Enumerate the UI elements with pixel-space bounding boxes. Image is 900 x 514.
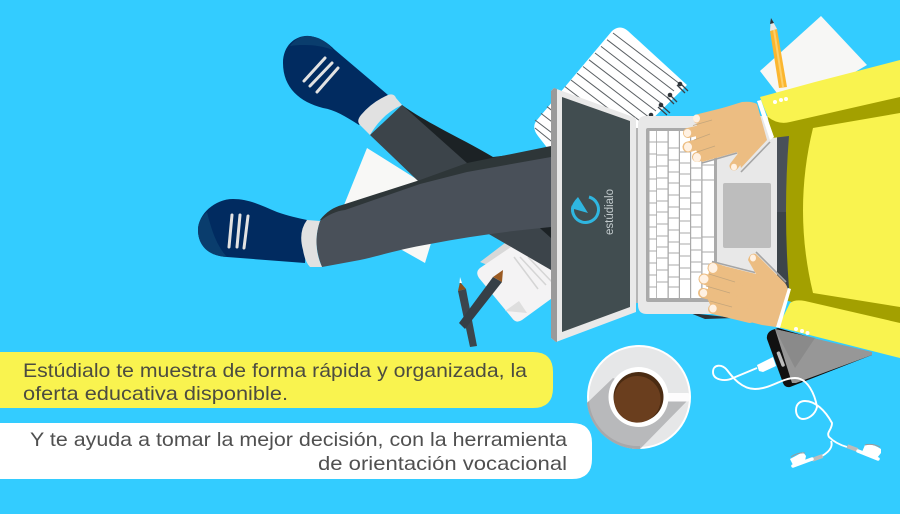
- right earbud: [847, 444, 881, 459]
- fingers: [703, 268, 750, 318]
- shirt cuff: [776, 288, 791, 328]
- upper foot: navy sock: [283, 36, 402, 135]
- hand shadow: [702, 142, 770, 172]
- laptop shadow: [690, 313, 735, 319]
- phone: [767, 328, 872, 387]
- sock stripes: [304, 58, 338, 92]
- callout: yellow message: oferta educativa disponible.: [23, 383, 288, 405]
- right hand on keyboard: [700, 252, 788, 327]
- keyboard: [646, 128, 717, 302]
- USB plug: [757, 357, 776, 372]
- fingernails: [684, 114, 737, 170]
- touchpad: [723, 183, 771, 248]
- icon: yellow pencil: [770, 18, 787, 88]
- coffee: [614, 372, 664, 422]
- callout: white message: Y te ayuda a tomar la mejor decisión, con la herramienta: [30, 429, 567, 451]
- callout: yellow message: [0, 352, 553, 408]
- notebook rings: [649, 82, 688, 117]
- coffee cup and saucer: [587, 345, 691, 449]
- sleeve buttons: [794, 327, 810, 335]
- laptop base: [638, 116, 777, 314]
- upper leg: [370, 105, 551, 270]
- laptop: [551, 88, 777, 342]
- jacket lower sleeve: [776, 288, 900, 358]
- lower foot: navy sock: [198, 199, 322, 267]
- earphones cable: [713, 357, 881, 466]
- fingernails: [700, 254, 756, 312]
- dark trousers behind laptop: [777, 135, 790, 290]
- saucer shadow: [587, 378, 688, 449]
- left earbud: [790, 452, 823, 466]
- logo wordmark: estúdialo: [604, 189, 616, 235]
- left hand on keyboard: [684, 102, 770, 172]
- jacket body: [767, 85, 900, 335]
- sock stripes: [229, 215, 248, 248]
- screen display: [562, 97, 630, 332]
- callout: white message: [0, 423, 592, 479]
- icon: crossed dark pencils: [458, 270, 503, 347]
- paper: upper right sheet: [760, 16, 867, 110]
- logo: estúdialo: [571, 189, 616, 235]
- fingers: [688, 111, 748, 166]
- laptop hinge: [636, 128, 638, 303]
- paper: sheet under legs: [340, 148, 445, 263]
- jacket upper sleeve: [757, 60, 900, 140]
- hand shadow: [712, 252, 786, 282]
- sock cuff: [358, 94, 402, 135]
- shirt cuff: [757, 100, 774, 140]
- sock cuff: [301, 220, 322, 267]
- cup handle: [664, 393, 689, 402]
- paper: crumpled note under laptop: [477, 243, 555, 322]
- notebook with spiral: [534, 28, 688, 190]
- callout: white message: de orientación vocacional: [318, 453, 567, 475]
- laptop screen lid: [551, 88, 636, 342]
- cup: [608, 367, 668, 427]
- lower leg: [316, 146, 551, 267]
- sleeve buttons: [773, 97, 788, 104]
- callout: yellow message: Estúdialo te muestra de forma rápida y organizada, la: [23, 360, 527, 382]
